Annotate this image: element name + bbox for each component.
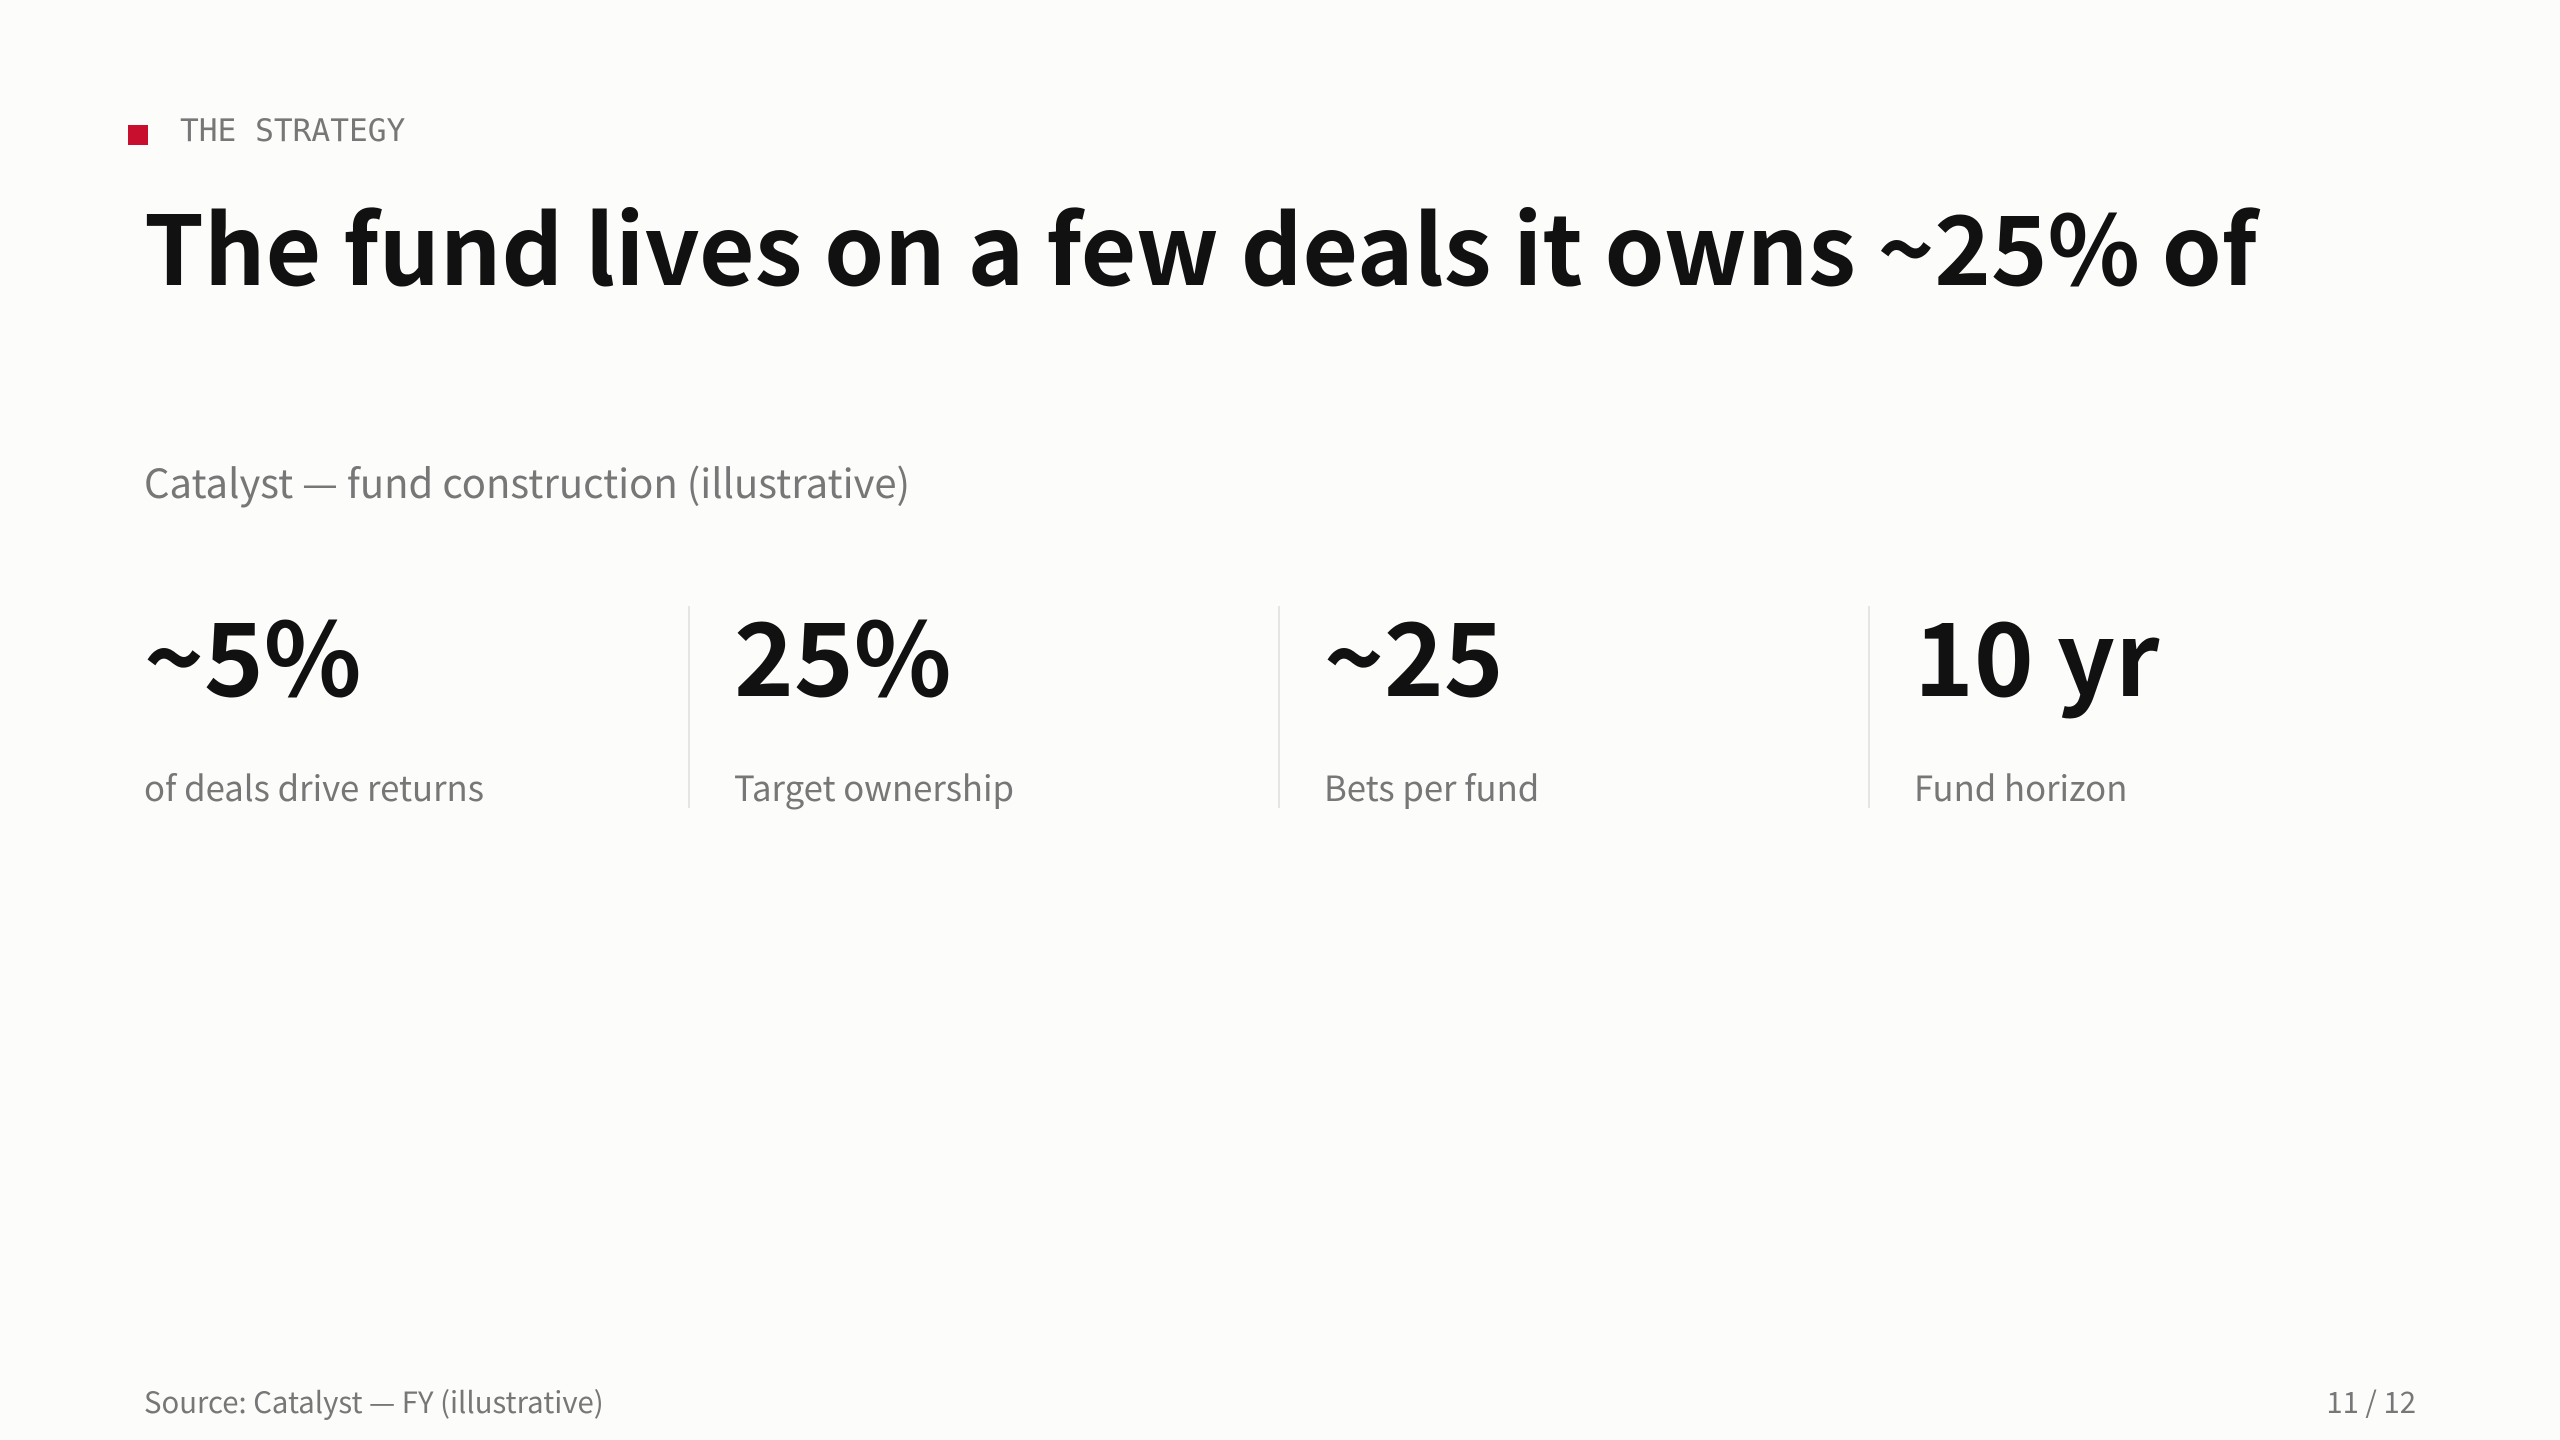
stat value: ~5% [144, 579, 362, 726]
stat: bets per fund [1324, 579, 1539, 811]
page number: 11 / 12 [2326, 1380, 2416, 1422]
stat label: Target ownership [734, 761, 1014, 811]
stat value: ~25 [1324, 579, 1504, 726]
eyebrow marker: red square [128, 125, 148, 145]
title: The fund lives on a few deals it owns ~25% of [144, 174, 2257, 312]
stat: target ownership [734, 579, 1014, 811]
stat: fund horizon [1914, 579, 2160, 811]
stat: deals driving returns [144, 579, 484, 811]
stat label: of deals drive returns [144, 761, 484, 811]
stat label: Fund horizon [1914, 761, 2127, 811]
subtitle: Catalyst — fund construction (illustrative) [144, 452, 910, 510]
source footnote: Source: Catalyst — FY (illustrative) [144, 1380, 604, 1422]
stat value: 10 yr [1914, 579, 2159, 726]
eyebrow label: THE STRATEGY [180, 113, 405, 149]
stat value: 25% [734, 579, 952, 726]
stat label: Bets per fund [1324, 761, 1539, 811]
